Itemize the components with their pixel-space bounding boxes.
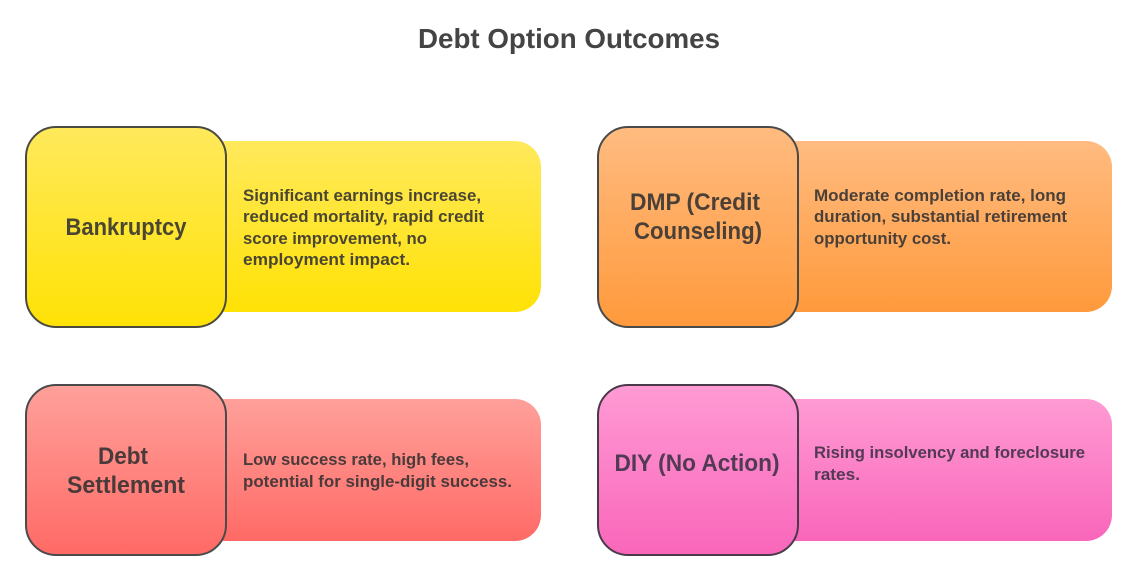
- label: DMP: DMP (Credit: [630, 189, 760, 216]
- label: Bankruptcy: Bankruptcy: [66, 214, 187, 241]
- label box: Bankruptcy: [26, 127, 226, 327]
- label box: DIY: [598, 385, 798, 555]
- label: Debt Settlement: Settlement: [67, 472, 185, 499]
- description: DMP: opportunity cost.: [814, 229, 951, 248]
- label: DIY: DIY (No Action): [614, 450, 780, 477]
- label box: Debt Settlement: [26, 385, 226, 555]
- description: DMP: Moderate completion rate, long: [814, 186, 1066, 205]
- description: Debt Settlement: [243, 450, 512, 491]
- description: Bankruptcy: reduced mortality, rapid credit: [243, 207, 484, 226]
- panel: Debt Settlement: [26, 385, 541, 555]
- label: DMP: Counseling): [634, 218, 762, 245]
- label: Debt Settlement: Debt: [98, 443, 148, 470]
- description: Bankruptcy: score improvement, no: [243, 229, 427, 248]
- panel: Bankruptcy: [26, 127, 541, 327]
- description: DIY: Rising insolvency and foreclosure: [814, 443, 1085, 462]
- description panel: DMP: [761, 141, 1112, 312]
- label: Debt Settlement: [67, 443, 185, 499]
- description: Debt Settlement: potential for single-digit success.: [243, 472, 512, 491]
- panel: DMP (Credit Counseling): [598, 127, 1112, 327]
- description: Bankruptcy: [243, 186, 484, 269]
- description: DIY: rates.: [814, 465, 860, 484]
- label box: DMP: [598, 127, 798, 327]
- label: DMP: [630, 189, 762, 245]
- description: DMP: [814, 186, 1067, 248]
- description panel: DIY: [761, 399, 1112, 541]
- description: DIY: [814, 443, 1085, 484]
- description panel: Bankruptcy: [190, 141, 541, 312]
- description panel: Debt Settlement: [190, 399, 541, 541]
- description: Bankruptcy: employment impact.: [243, 250, 410, 269]
- description: DMP: duration, substantial retirement: [814, 207, 1067, 226]
- description: Debt Settlement: Low success rate, high fees,: [243, 450, 469, 469]
- title: Debt Option Outcomes: [418, 23, 720, 54]
- panel: DIY (No Action): [598, 385, 1112, 555]
- description: Bankruptcy: Significant earnings increase,: [243, 186, 481, 205]
